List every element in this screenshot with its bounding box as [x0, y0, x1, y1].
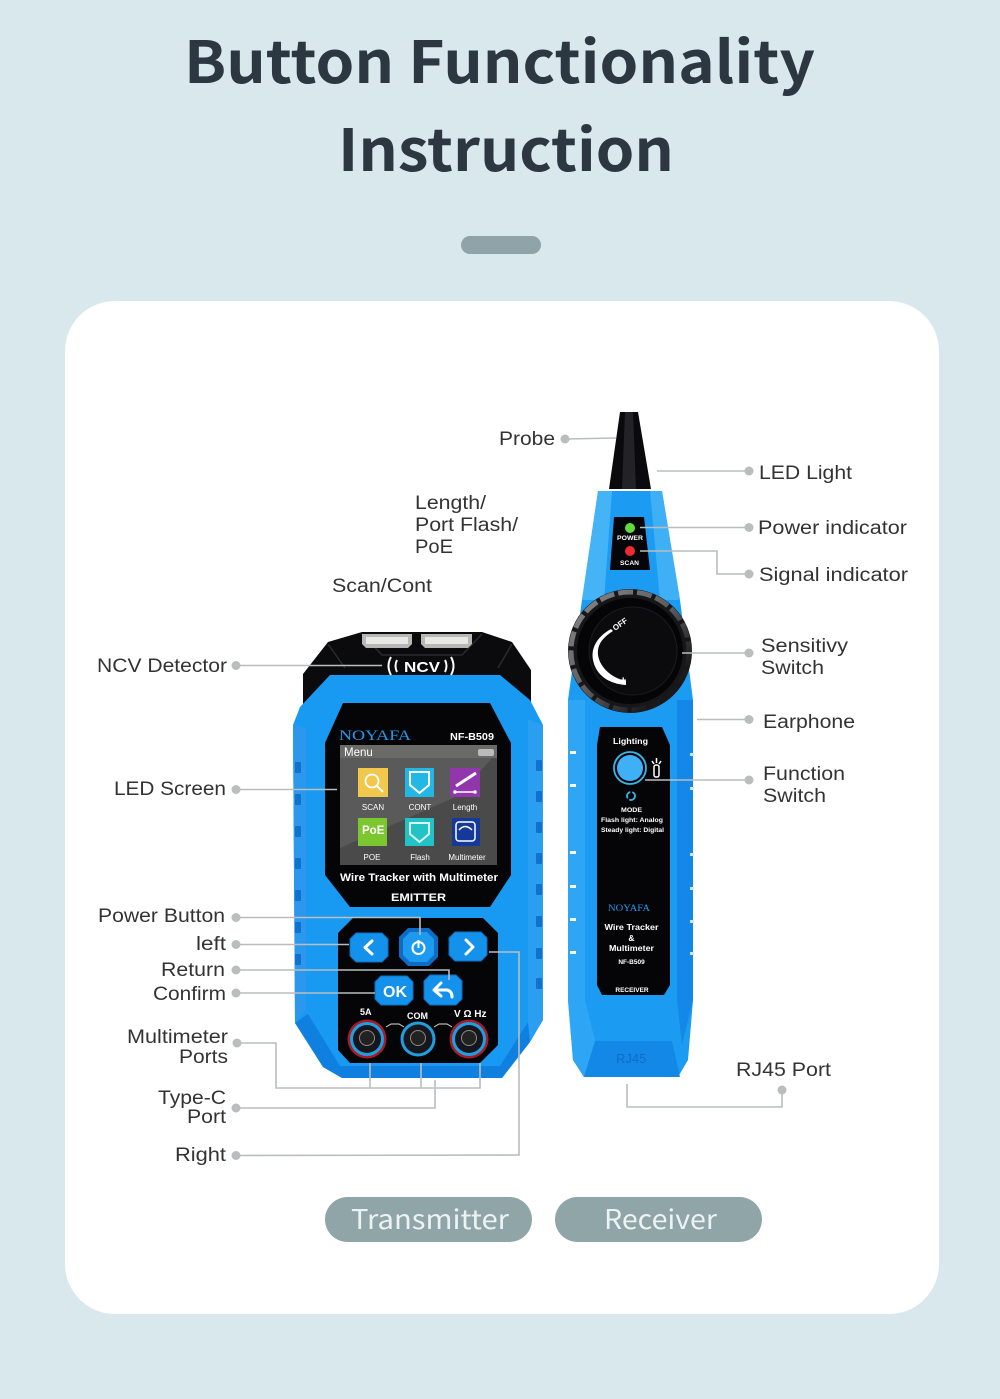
- port labels: V Ω Hz: [454, 1009, 486, 1020]
- receiver caption: [604, 922, 659, 994]
- mode text: MODE: [621, 807, 643, 814]
- callout: Earphone: Earphone: [763, 712, 855, 733]
- divider pill: [461, 236, 541, 254]
- callout: Return: [161, 960, 449, 981]
- receiver caption: Wire Tracker: [604, 922, 659, 932]
- callout: NCV Detector: [97, 656, 382, 677]
- label: Length / Port Flash / PoE: Length/: [415, 493, 487, 514]
- device caption: Wire Tracker with Multimeter: [340, 872, 499, 884]
- icon captions: Flash: [410, 853, 430, 862]
- sensitivity knob: [568, 589, 692, 713]
- label: Length / Port Flash / PoE: PoE: [415, 537, 453, 558]
- pill: Transmitter: Transmitter: [351, 1198, 510, 1237]
- callout: Sensitivy Switch: Sensitivy: [761, 636, 849, 657]
- callout: Function Switch: Switch: [763, 786, 826, 807]
- callout: Type-C Port: [158, 1080, 435, 1128]
- sensitivity knob: OFF: [611, 616, 629, 633]
- scan caption: SCAN: [620, 560, 639, 567]
- callout: Earphone: [697, 712, 855, 733]
- port labels: COM: [407, 1011, 428, 1021]
- callout: RJ45 Port: [627, 1060, 832, 1107]
- callout: LED Screen: LED Screen: [114, 779, 226, 800]
- device: receiver: [568, 412, 694, 1077]
- callout: Function Switch: Function: [763, 764, 845, 785]
- device: transmitter: [293, 632, 543, 1078]
- icon captions: POE: [364, 853, 380, 862]
- callout: Power Button: Power Button: [98, 906, 225, 927]
- callout: Signal indicator: Signal indicator: [759, 565, 909, 586]
- emitter caption: EMITTER: [391, 892, 446, 904]
- probe tip: [609, 412, 651, 489]
- title: Instruction: [338, 104, 674, 188]
- receiver caption: NF-B509: [618, 959, 645, 966]
- transmitter top housing: [303, 632, 531, 705]
- power caption: POWER: [617, 535, 643, 542]
- function button: [614, 752, 646, 784]
- panel: product card: [65, 301, 939, 1314]
- callout: Multimeter Ports: Ports: [179, 1047, 228, 1068]
- callout: Right: Right: [175, 1145, 227, 1166]
- lighting caption: Lighting: [613, 736, 648, 746]
- multimeter ports: [348, 1020, 488, 1058]
- icon: mode: [627, 792, 635, 800]
- mode text: Steady light: Digital: [601, 827, 664, 834]
- label: Length / Port Flash / PoE: [415, 493, 519, 558]
- power LED: [625, 523, 635, 533]
- keypad panel: [338, 918, 498, 1063]
- callout: Type-C Port: Type-C: [158, 1088, 226, 1109]
- callout: Function Switch: [645, 764, 845, 807]
- receiver brand logo: NOYAFA: [608, 904, 650, 914]
- callout: Confirm: Confirm: [153, 984, 226, 1005]
- receiver blue body: [568, 491, 694, 1077]
- icon captions: SCAN: [362, 803, 384, 812]
- icon: torch: [652, 758, 661, 777]
- callout: Power Button: [98, 906, 420, 935]
- pill: Receiver: Receiver: [604, 1198, 718, 1237]
- callout: Right: [175, 952, 519, 1166]
- icon: length: [450, 768, 480, 797]
- scan LED: [625, 546, 635, 556]
- mode text: Flash light: Analog: [601, 817, 663, 824]
- callout: Probe: [499, 429, 616, 450]
- icon: scan: [358, 768, 388, 797]
- callout: Power indicator: [640, 518, 908, 539]
- title: [184, 16, 815, 188]
- icon: poe: [358, 818, 387, 846]
- receiver caption: &: [628, 933, 635, 943]
- callout: left: [196, 934, 349, 955]
- icon: flash: [405, 818, 434, 846]
- callout: NCV Detector: NCV Detector: [97, 656, 228, 677]
- button: OK: [375, 976, 413, 1005]
- callout: Type-C Port: Port: [187, 1107, 227, 1128]
- callout: LED Light: [657, 463, 853, 484]
- button: left: [350, 933, 388, 962]
- receiver caption: Multimeter: [609, 943, 655, 953]
- LCD display: Menu: [344, 747, 373, 759]
- callouts: transmitter left side: [97, 493, 519, 1166]
- callouts: receiver: [499, 429, 909, 1107]
- callout: Probe: Probe: [499, 429, 555, 450]
- callout: left: left: [196, 934, 227, 955]
- callout: RJ45 Port: RJ45 Port: [736, 1060, 832, 1081]
- icon: cont: [405, 768, 434, 797]
- callout: Confirm: [153, 984, 375, 1005]
- transmitter blue body: [293, 675, 543, 1078]
- callout: Multimeter Ports: Multimeter: [127, 1027, 229, 1048]
- indicator window: [610, 517, 650, 570]
- callout: Signal indicator: [640, 551, 909, 586]
- LCD display: [340, 745, 497, 865]
- icon: multimeter: [452, 818, 480, 846]
- callout: Multimeter Ports: [127, 1027, 480, 1088]
- NCV logo: [388, 657, 454, 676]
- button: return: [424, 975, 462, 1005]
- pill: Receiver: [555, 1197, 762, 1242]
- screen panel: [325, 703, 511, 907]
- button: power: [399, 928, 438, 966]
- icon captions: [362, 803, 486, 862]
- title: Button Functionality: [184, 16, 815, 100]
- button: OK: OK: [383, 984, 407, 1001]
- icon captions: CONT: [409, 803, 431, 812]
- sensitivity knob: +: [620, 675, 626, 687]
- callout: Sensitivy Switch: Switch: [761, 658, 824, 679]
- mode text: [601, 807, 664, 834]
- port labels: 5A: [360, 1007, 372, 1017]
- port labels: [360, 1007, 486, 1021]
- RJ45 marking: RJ45: [616, 1051, 646, 1066]
- brand logo: NOYAFA: [339, 728, 411, 744]
- receiver caption: RECEIVER: [615, 987, 649, 994]
- function panel: [597, 727, 670, 995]
- callout: LED Screen: [114, 779, 337, 800]
- callout: Sensitivy Switch: [682, 636, 849, 679]
- NCV logo: NCV: [404, 659, 440, 676]
- callout: Power indicator: Power indicator: [758, 518, 908, 539]
- pill: Transmitter: [325, 1197, 532, 1242]
- button: right: [449, 932, 487, 961]
- callout: Return: Return: [161, 960, 225, 981]
- icon captions: Multimeter: [448, 853, 486, 862]
- icon: poe: PoE: [362, 825, 385, 837]
- label: Length / Port Flash / PoE: Port Flash/: [415, 515, 519, 536]
- model number: NF-B509: [450, 731, 494, 743]
- label: Scan/Cont: Scan/Cont: [332, 576, 433, 597]
- callout: LED Light: LED Light: [759, 463, 853, 484]
- icon captions: Length: [453, 803, 477, 812]
